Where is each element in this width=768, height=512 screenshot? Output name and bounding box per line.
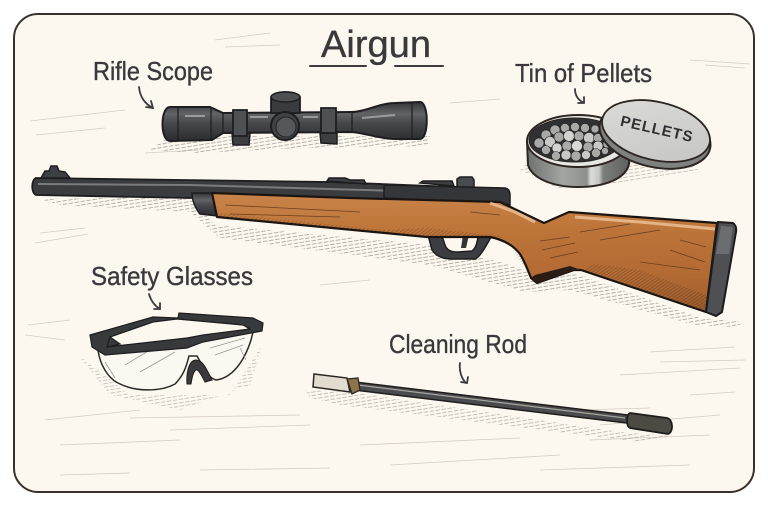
- label: safety glasses: Safety Glasses: [91, 261, 253, 291]
- fore-end block: [192, 193, 218, 216]
- rod highlight: [358, 385, 625, 418]
- trigger guard: [428, 235, 491, 259]
- wooden stock: [212, 193, 717, 312]
- scope lines: [178, 103, 412, 140]
- rear sight post: [457, 177, 474, 189]
- nose piece: [187, 360, 212, 384]
- arrow: tin of pellets: [575, 89, 584, 103]
- label: rifle scope: Rifle Scope: [93, 56, 213, 86]
- label: cleaning rod: Cleaning Rod: [389, 329, 527, 359]
- barrel: [32, 178, 505, 204]
- butt plate highlight: [716, 226, 733, 254]
- arrow: cleaning rod: [460, 363, 468, 383]
- tin interior: [529, 118, 621, 162]
- scope highlights: [185, 115, 395, 118]
- rear sight rail: [327, 178, 454, 186]
- scope tube: [162, 102, 427, 141]
- icon: tin of pellets: [520, 90, 717, 190]
- side knob: [271, 112, 299, 140]
- trigger: [461, 235, 469, 248]
- scope rings: [233, 108, 336, 136]
- turret top: [271, 92, 300, 102]
- tin rim: [527, 115, 629, 167]
- scope mount feet: [232, 133, 337, 145]
- label: tin of pellets: Tin of Pellets: [515, 58, 652, 88]
- tin lid top: [596, 90, 716, 172]
- lenses: [98, 328, 254, 390]
- tin wall: [527, 141, 630, 187]
- rod shaft: [354, 382, 628, 423]
- butt plate: [706, 222, 736, 316]
- rod handle: [627, 413, 672, 434]
- brush: [313, 374, 350, 392]
- tin lid side: [593, 93, 717, 179]
- arrow: safety glasses: [149, 294, 160, 309]
- knob centre: [276, 117, 296, 137]
- lid label: PELLETS: [619, 113, 695, 146]
- stock highlight: [490, 203, 715, 229]
- icon: cleaning rod: [305, 374, 672, 442]
- ferrule: [347, 378, 360, 394]
- lens sketch lines: [105, 338, 246, 378]
- title: Airgun: [321, 24, 431, 66]
- grip underside: [531, 266, 581, 283]
- icon: rifle scope: [150, 92, 430, 153]
- icon: rifle: [32, 166, 745, 327]
- receiver: [384, 185, 510, 205]
- turret: [271, 92, 300, 113]
- barrel highlight: [38, 184, 505, 194]
- arrow: rifle scope: [139, 87, 153, 108]
- frame: [90, 313, 263, 355]
- wood grain: [225, 205, 706, 270]
- pellets: [534, 122, 611, 161]
- front sight: [41, 166, 70, 178]
- icon: safety glasses: [78, 313, 263, 410]
- stock shading: [217, 213, 708, 312]
